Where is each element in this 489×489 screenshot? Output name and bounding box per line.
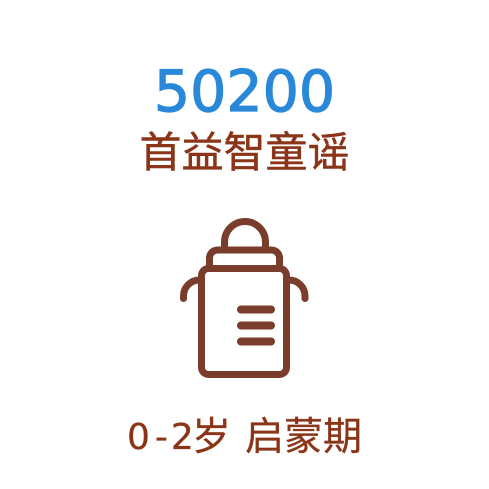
caption: age stage: [127, 416, 362, 459]
number heading: 50200: 50200: [154, 59, 335, 125]
subtitle: product name: 首益智童谣: [139, 129, 350, 176]
caption: age stage: 岁: [192, 416, 231, 459]
caption: age stage: 0-2: [127, 417, 194, 458]
caption: age stage: 启蒙期: [245, 416, 362, 459]
